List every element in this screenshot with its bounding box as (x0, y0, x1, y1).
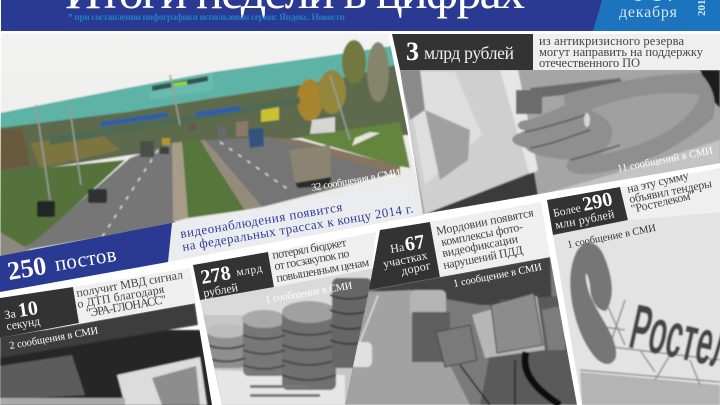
header band (1, 0, 720, 31)
description: получит МВД сигнал (75, 267, 184, 300)
caption strip: на федеральных трассах к концу 2014 г. (181, 201, 414, 254)
blue label: 250 posts: 250 (5, 251, 48, 286)
dark label: 290 (580, 188, 614, 216)
description: потерял бюджет (271, 235, 348, 262)
media count: 1 сообщение в СМИ (566, 223, 657, 251)
dark label: рублей (202, 280, 240, 300)
description: из антикризисного резерва (539, 34, 684, 48)
panel: highway photo (0, 33, 430, 293)
dark label (193, 252, 274, 300)
description: комплексы фото- (440, 219, 524, 249)
dark label: 278 (199, 262, 232, 289)
description: нарушений ПДД (442, 243, 524, 272)
dark label (547, 187, 628, 235)
blue label: 250 posts: постов (53, 242, 118, 276)
dark label: млрд (235, 263, 263, 279)
description: на эту сумму (626, 168, 690, 196)
dark label: участках (382, 248, 429, 271)
panel: 278 billion rubles (193, 232, 380, 405)
date box (593, 0, 720, 31)
date box: декабря (619, 4, 678, 21)
footnote: * при составлении инфографики использован сервис Яндекс. Новости (68, 12, 346, 23)
photo: hand on banknotes (395, 68, 720, 218)
description: отечественного ПО (539, 56, 640, 70)
description: от госзакупок по (273, 246, 350, 273)
caption strip: видеонаблюдения появится (179, 199, 343, 241)
panel: 10 seconds (0, 267, 215, 405)
description (620, 168, 720, 220)
dark label: секунд (5, 314, 41, 333)
dark label: 10 (16, 297, 40, 322)
media count: 1 сообщение в СМИ (452, 262, 543, 290)
media count: 1 сообщение в СМИ (265, 281, 354, 306)
media count: 2 сообщения в СМИ (9, 325, 100, 352)
description (533, 34, 720, 70)
photo: car dashboard tablet (0, 303, 215, 405)
photo: traffic camera (340, 255, 580, 405)
description: повышенным ценам (275, 255, 370, 285)
dark label (369, 222, 440, 290)
description: "Ростелеком" (630, 188, 696, 216)
caption strip (168, 183, 418, 262)
dark label: Более (552, 202, 582, 220)
panel: 67 road sections (340, 202, 580, 405)
dark label (0, 287, 79, 338)
panel: 3 billion rubles (392, 34, 720, 218)
description: объявил тендеры (628, 176, 713, 206)
description: могут направить на поддержку (539, 45, 704, 59)
dark label: На (389, 240, 406, 256)
dark label: 3 (406, 37, 419, 66)
description (268, 232, 376, 287)
dark label: дорог (400, 258, 432, 278)
description (73, 267, 196, 323)
media count: 32 сообщения в СМИ (311, 167, 402, 194)
dark label: млн рублей (554, 207, 616, 232)
media count: 11 сообщений в СМИ (616, 146, 714, 175)
description: о ДТП благодаря (76, 282, 166, 311)
description: Мордовии появятся (435, 205, 535, 238)
photo: Rostelecom sign (545, 210, 720, 405)
dark label (392, 34, 533, 70)
panel: 290 million rubles (545, 168, 720, 405)
dark label: За (3, 306, 17, 322)
dark label: 67 (403, 231, 427, 256)
photo: highway with bridge (0, 33, 424, 256)
blue label: 250 posts (0, 223, 172, 292)
dark label: млрд рублей (424, 43, 514, 63)
description: "ЭРА-ГЛОНАСС" (85, 292, 167, 320)
photo: coin stacks (195, 265, 380, 405)
description (430, 202, 550, 277)
description: видеофиксации (441, 231, 520, 260)
